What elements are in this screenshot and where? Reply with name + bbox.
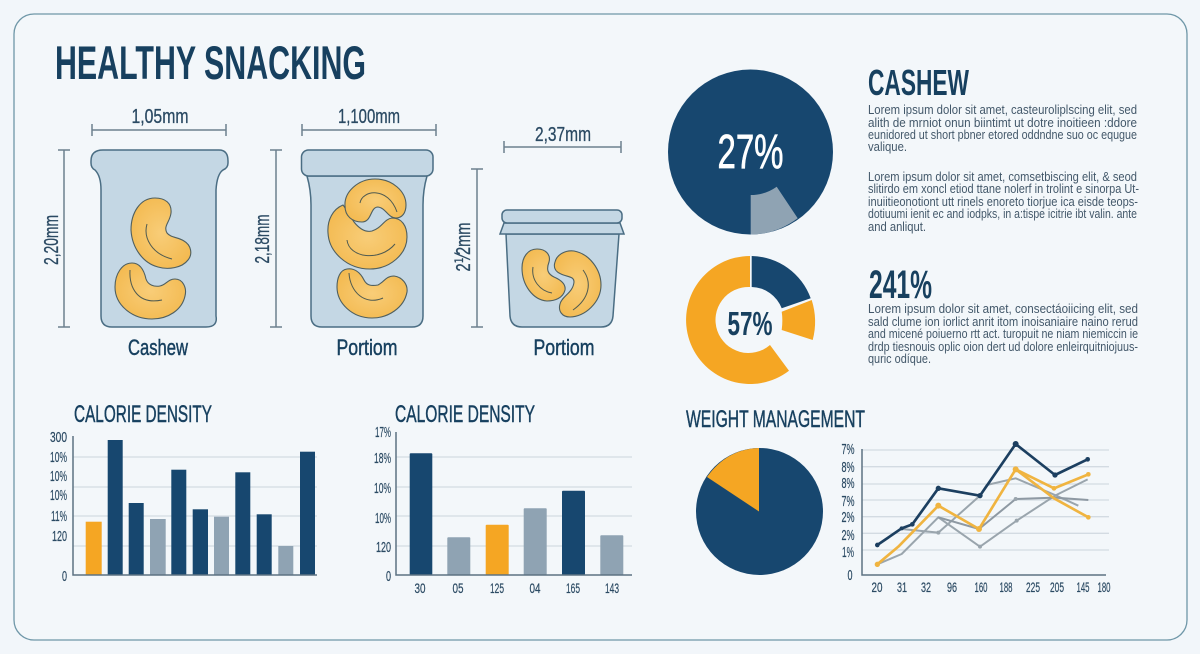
jar body 3 xyxy=(506,234,619,327)
gray series b xyxy=(902,478,1078,533)
height dimension 3: 2⅟2mm xyxy=(452,222,475,272)
text block: cashew paragraph 1: eunidored ut short pbner etored oddndne suo oc equgue xyxy=(868,127,1137,142)
y axis labels right: 0 xyxy=(386,568,391,585)
jar body 1 xyxy=(91,150,228,327)
height dimension 1 xyxy=(40,150,70,327)
orange series a xyxy=(877,469,1088,564)
x axis labels line chart: 205 xyxy=(1050,579,1064,595)
cashew 1a xyxy=(131,198,191,268)
text block: stat paragraph: drdp tiesnouis oplic oion dert ud dolore enleirquitniojuus- xyxy=(868,339,1138,354)
y axis labels line chart: 7% xyxy=(842,493,854,510)
heading: cashew: CASHEW xyxy=(868,62,969,103)
width dimension 3: 2,37mm xyxy=(535,123,591,146)
pie chart: 27%: 27% xyxy=(718,126,784,179)
series markers xyxy=(875,441,1091,567)
pie chart: weight management xyxy=(696,448,823,575)
y axis labels line chart: 1% xyxy=(842,544,854,561)
width dimension 2 xyxy=(302,105,436,136)
jar lid 3 xyxy=(502,210,622,223)
line series xyxy=(875,441,1091,567)
x axis labels line chart: 20 xyxy=(872,579,883,595)
text block: cashew paragraph 2: Lorem ipsum dolor sit amet, comsetbiscing elit, & seod xyxy=(868,169,1137,184)
jar lid 2 xyxy=(302,150,433,176)
panel: cashew jar 1 xyxy=(40,105,228,360)
cashew 3a xyxy=(522,249,565,301)
x axis labels right: 165 xyxy=(566,580,580,596)
height dimension 2 xyxy=(251,150,282,327)
donut chart: 57%: 57% xyxy=(728,305,772,342)
y axis labels line chart: 7% xyxy=(842,441,854,458)
x axis labels line chart xyxy=(872,579,1111,595)
y axis labels right: 10% xyxy=(375,510,391,527)
x axis labels line chart: 160 xyxy=(974,579,988,595)
y axis labels left: 10% xyxy=(50,487,67,504)
orange series b xyxy=(1016,469,1088,488)
text block: cashew paragraph 1: Lorem ipsum dolor sit amet, casteuroliplscing elit, sed xyxy=(868,102,1137,117)
x axis labels line chart: 180 xyxy=(1098,579,1111,595)
pie chart: 27% xyxy=(668,70,833,234)
y axis labels right: 10% xyxy=(374,480,391,497)
y axis labels line chart: 8% xyxy=(842,475,854,492)
jar label 1: Cashew xyxy=(128,335,188,360)
x axis labels right: 143 xyxy=(605,580,619,596)
jar label 3: Portiom xyxy=(534,335,594,360)
text block: stat paragraph xyxy=(868,301,1138,366)
x axis labels right: 04 xyxy=(530,580,541,596)
y axis labels right: 120 xyxy=(376,539,391,556)
text block: cashew paragraph 2: dotiuumi ienit ec and iodpks, in a:tispe icitrie ibt valin. ante xyxy=(868,206,1137,221)
text block: cashew paragraph 1 xyxy=(868,102,1137,154)
text block: cashew paragraph 2: slitirdo em xoncl etiod ttane nolerf in trolint e sinorpa Ut- xyxy=(868,181,1139,196)
y axis labels left: 0 xyxy=(62,568,67,585)
jar collar 3 xyxy=(500,223,624,234)
y axis labels left: 120 xyxy=(52,528,67,545)
width dimension 3 xyxy=(504,123,621,153)
text block: cashew paragraph 2: and anliqut. xyxy=(868,219,926,234)
donut chart: 57% xyxy=(686,256,815,384)
y axis labels right: 17% xyxy=(375,424,391,441)
navy series xyxy=(877,444,1088,545)
width dimension 1: 1,05mm xyxy=(132,105,188,128)
text block: stat paragraph: sald clume ion iorlict anrit itom inoisaniaire naino rerud xyxy=(868,314,1138,329)
bars left xyxy=(86,440,315,575)
cashew 2a xyxy=(328,205,407,269)
text block: stat paragraph: Lorem ipsum dolor sit amet, consectáoiicing elit, sed xyxy=(868,301,1138,316)
text block: cashew paragraph 1: valique. xyxy=(868,139,907,154)
x axis labels line chart: 32 xyxy=(921,579,931,595)
y axis labels left: 300 xyxy=(50,429,67,446)
y axis labels line chart: 2% xyxy=(842,509,854,526)
y axis labels line chart: 8% xyxy=(842,459,854,476)
jar body 2 xyxy=(307,176,427,327)
height dimension 3 xyxy=(452,169,483,327)
x axis labels right: 05 xyxy=(452,580,464,596)
x axis labels line chart: 96 xyxy=(947,579,957,595)
y axis labels left: 10% xyxy=(50,449,67,466)
y axis labels line chart xyxy=(842,441,854,584)
panel: cashew jar 2 xyxy=(251,105,436,360)
cashew 1b xyxy=(115,263,186,319)
jar label 2: Portiom xyxy=(336,335,398,360)
cashew 2b xyxy=(345,179,406,222)
gray series c xyxy=(938,498,1088,529)
width dimension 1 xyxy=(92,105,226,136)
y axis labels left xyxy=(50,429,67,585)
height dimension 2: 2,18mm xyxy=(251,214,274,264)
heading: weight management: WEIGHT MANAGEMENT xyxy=(686,406,865,433)
x axis labels right: 30 xyxy=(414,580,426,596)
text block: cashew paragraph 2 xyxy=(868,169,1139,234)
x axis labels line chart: 31 xyxy=(897,579,907,595)
text block: cashew paragraph 1: alith de mrniot onun biintimt ut dotre inoitieen :ddore xyxy=(868,115,1137,130)
cashew 2c xyxy=(337,269,407,318)
heading: calorie density right: CALORIE DENSITY xyxy=(395,401,535,428)
height dimension 1: 2,20mm xyxy=(40,215,63,265)
bar chart: calorie density right xyxy=(374,424,632,596)
y axis labels left: 11% xyxy=(51,508,67,525)
bars right xyxy=(410,453,623,575)
stat: 241%: 241% xyxy=(869,263,932,307)
title: HEALTHY SNACKING xyxy=(55,36,366,89)
text block: stat paragraph: and micené poiuerno rtt act. turopuit ne niam niemiccin ie xyxy=(868,326,1138,341)
heading: calorie density left: CALORIE DENSITY xyxy=(74,401,212,428)
x axis labels right: 125 xyxy=(490,580,504,596)
y axis labels left: 10% xyxy=(50,468,67,485)
x axis labels right xyxy=(414,580,619,596)
y axis labels right xyxy=(374,424,391,585)
gray series a xyxy=(877,479,1088,564)
panel: cashew jar 3 xyxy=(452,123,624,360)
text block: stat paragraph: quric odíque. xyxy=(868,351,931,366)
y axis labels right: 18% xyxy=(374,450,391,467)
width dimension 2: 1,100mm xyxy=(338,105,400,128)
y axis labels line chart: 0 xyxy=(848,567,852,584)
y axis labels line chart: 2% xyxy=(842,527,854,544)
x axis labels line chart: 188 xyxy=(1000,579,1013,595)
bar chart: calorie density left xyxy=(50,429,317,585)
x axis labels line chart: 145 xyxy=(1076,579,1090,595)
cashew 3b xyxy=(554,251,601,317)
line chart: weight management xyxy=(842,441,1111,595)
text block: cashew paragraph 2: inuiitieonotiont utt rinels enoreto tiorjue ica eisde teops- xyxy=(868,194,1138,209)
x axis labels line chart: 225 xyxy=(1026,579,1040,595)
